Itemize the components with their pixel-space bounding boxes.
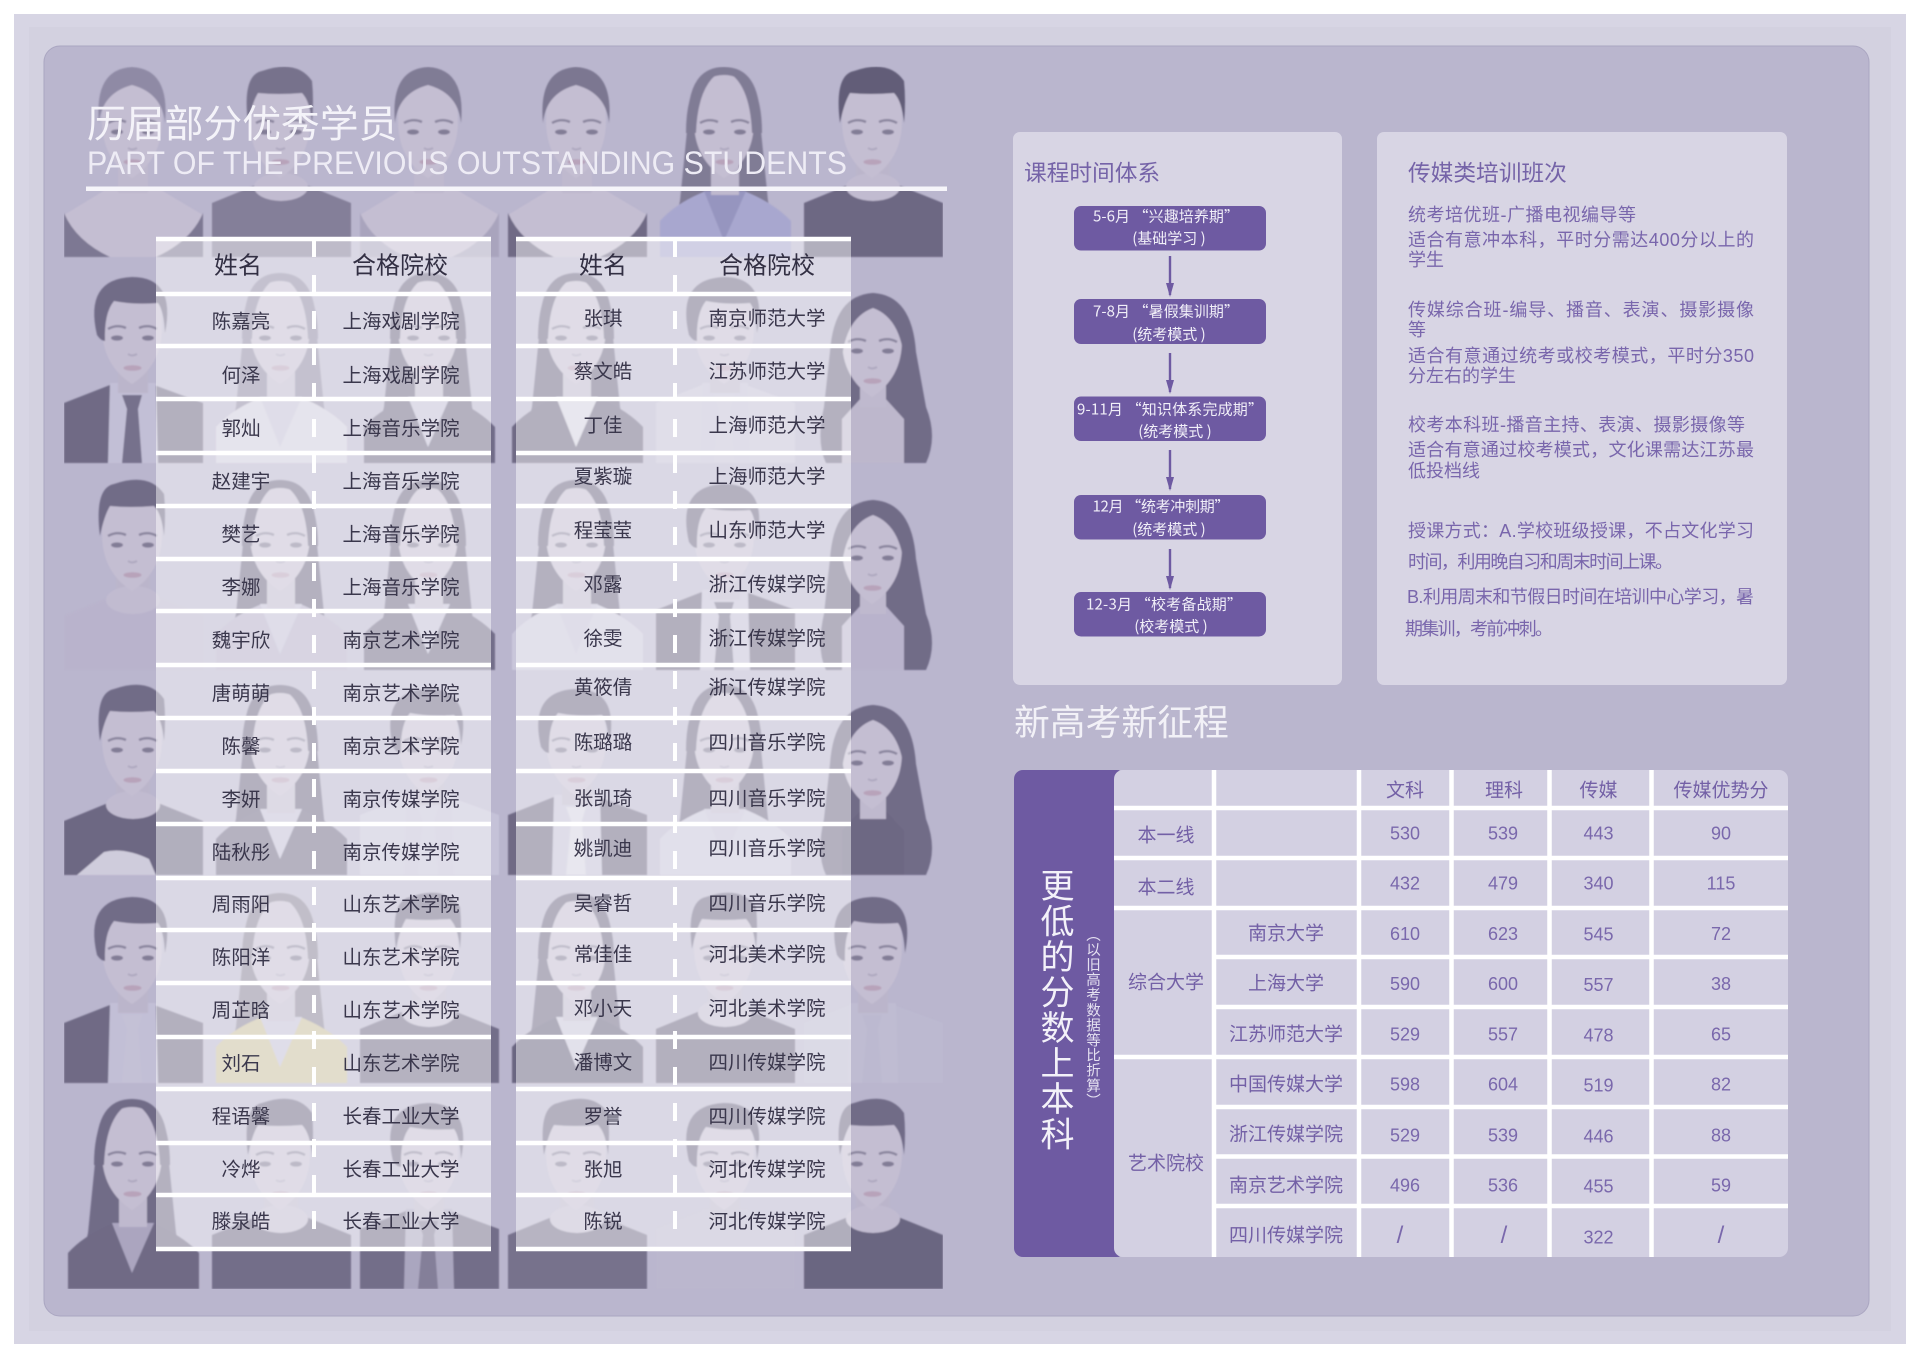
rows: 四川传媒学院 xyxy=(708,1106,826,1128)
comparison table xyxy=(1014,770,1788,1257)
rows: 山东艺术学院 xyxy=(342,947,460,969)
column headers xyxy=(1386,780,1769,802)
class 2: 等 xyxy=(1408,320,1426,340)
class 1: 适合有意冲本科，平时分需达400分以上的 xyxy=(1408,230,1754,250)
header: 姓名 xyxy=(214,253,262,280)
rows: 蔡文皓 xyxy=(574,361,632,383)
scores: 529 xyxy=(1390,1025,1420,1045)
step 5: (校考模式 ) xyxy=(1134,616,1208,636)
portrait wall: six rows of six student photos xyxy=(64,67,943,1289)
step 3: 9-11月 “知识体系完成期” xyxy=(1077,398,1263,420)
title english: PART OF THE PREVIOUS OUTSTANDING STUDENTS xyxy=(87,145,847,181)
heading: 传媒类培训班次 xyxy=(1408,160,1567,186)
scores: 519 xyxy=(1583,1076,1614,1096)
rows: 山东艺术学院 xyxy=(342,894,460,916)
teaching method: 时间，利用晚自习和周末时间上课。 xyxy=(1408,552,1673,572)
scores: 604 xyxy=(1488,1075,1518,1095)
rows: 上海音乐学院 xyxy=(342,418,460,440)
photo row 1 xyxy=(64,67,943,257)
school names: 四川传媒学院 xyxy=(1229,1224,1343,1246)
scores: 82 xyxy=(1711,1075,1731,1095)
row group labels: 综合大学 xyxy=(1128,972,1204,994)
photo row 3 xyxy=(64,480,932,670)
scores: 623 xyxy=(1488,924,1518,944)
column headers: 文科 xyxy=(1386,780,1424,802)
heading: new gaokao: 新高考新征程 xyxy=(1014,703,1229,743)
row group labels: 本二线 xyxy=(1137,876,1195,898)
panel: course schedule xyxy=(1013,132,1342,685)
rows: 山东师范大学 xyxy=(708,520,826,542)
rows: 江苏师范大学 xyxy=(708,361,826,383)
arrow xyxy=(1169,353,1171,392)
step 3 xyxy=(1074,396,1266,442)
rows: 郭灿 xyxy=(221,418,261,440)
rows: 浙江传媒学院 xyxy=(708,574,826,596)
teaching method: 期集训，考前冲刺。 xyxy=(1405,619,1553,639)
rows: 魏宇欣 xyxy=(212,630,270,652)
table background xyxy=(516,239,851,1249)
arrow xyxy=(1169,450,1171,489)
header xyxy=(214,253,448,280)
scores: 530 xyxy=(1390,824,1420,844)
step 3: (统考模式 ) xyxy=(1138,420,1212,442)
scores: 557 xyxy=(1583,975,1614,995)
panel: training classes xyxy=(1377,132,1787,685)
title chinese: 历届部分优秀学员 xyxy=(87,104,397,146)
rows: 南京传媒学院 xyxy=(342,842,460,864)
rows: 陈馨 xyxy=(221,736,261,758)
step 2 xyxy=(1074,299,1266,344)
scores: 590 xyxy=(1390,974,1420,994)
photo row 4 xyxy=(64,685,932,875)
rows: 冷烨 xyxy=(221,1159,261,1181)
scores: / xyxy=(1718,1222,1725,1249)
class 3: 校考本科班-播音主持、表演、摄影摄像等 xyxy=(1408,415,1745,435)
table: students right xyxy=(516,239,851,1249)
rows: 上海戏剧学院 xyxy=(342,365,460,387)
arrow xyxy=(1169,256,1171,295)
rows: 陈嘉亮 xyxy=(212,311,270,333)
side title: 更低的分数上本科 xyxy=(1035,868,1074,1152)
class 2: 传媒综合班-编导、播音、表演、摄影摄像 xyxy=(1408,300,1754,320)
rows: 李妍 xyxy=(221,789,261,811)
school names xyxy=(1229,922,1343,1246)
scores: 65 xyxy=(1711,1025,1731,1045)
cell background xyxy=(1114,770,1788,1257)
scores: 600 xyxy=(1488,974,1518,994)
scores: 529 xyxy=(1390,1126,1420,1146)
rows: 潘博文 xyxy=(574,1052,632,1074)
school names: 南京艺术学院 xyxy=(1229,1174,1343,1196)
step 2: (统考模式 ) xyxy=(1132,324,1206,344)
rows: 上海音乐学院 xyxy=(342,471,460,493)
column headers: 理科 xyxy=(1485,780,1523,802)
rows: 河北传媒学院 xyxy=(708,1159,826,1181)
grid lines xyxy=(1114,770,1788,1257)
school names: 南京大学 xyxy=(1248,922,1324,944)
panel background xyxy=(1013,132,1342,685)
scores: 478 xyxy=(1583,1026,1614,1046)
class 3: 低投档线 xyxy=(1408,461,1480,481)
step 4: 12月 “统考冲刺期” xyxy=(1092,496,1230,516)
dashed divider xyxy=(312,239,316,1249)
school names: 上海大学 xyxy=(1248,972,1324,994)
scores: 88 xyxy=(1711,1126,1731,1146)
scores xyxy=(1390,824,1735,1249)
rows: 陈锐 xyxy=(583,1211,623,1233)
purple side panel xyxy=(1014,770,1126,1257)
rows: 邓小天 xyxy=(574,998,632,1020)
rows: 南京艺术学院 xyxy=(342,630,460,652)
step 1 xyxy=(1074,206,1266,250)
class 3 xyxy=(1408,415,1754,481)
photo row 6 xyxy=(68,1099,943,1289)
rows: 四川音乐学院 xyxy=(708,788,826,810)
rows: 上海师范大学 xyxy=(708,415,826,437)
scores: 610 xyxy=(1390,924,1420,944)
scores: 115 xyxy=(1707,874,1735,894)
rows: 陈阳洋 xyxy=(212,947,270,969)
class 2: 适合有意通过统考或校考模式，平时分350 xyxy=(1408,346,1754,366)
scores: 598 xyxy=(1390,1075,1420,1095)
rows: 黄筱倩 xyxy=(574,677,632,699)
rows: 长春工业大学 xyxy=(342,1211,460,1233)
rows: 四川音乐学院 xyxy=(708,893,826,915)
step 5 xyxy=(1074,592,1266,636)
rows: 河北传媒学院 xyxy=(708,1211,826,1233)
rows: 上海音乐学院 xyxy=(342,524,460,546)
heading: 课程时间体系 xyxy=(1024,160,1160,186)
rows: 山东艺术学院 xyxy=(342,1000,460,1022)
rows: 常佳佳 xyxy=(574,944,632,966)
rows: 南京艺术学院 xyxy=(342,736,460,758)
rows: 姚凯迪 xyxy=(574,838,632,860)
rows: 四川传媒学院 xyxy=(708,1052,826,1074)
panel background xyxy=(1377,132,1787,685)
scores: / xyxy=(1397,1222,1404,1249)
rows: 张旭 xyxy=(583,1159,623,1181)
scores: 539 xyxy=(1488,824,1518,844)
row group labels xyxy=(1128,824,1204,1174)
step 1: (基础学习 ) xyxy=(1132,228,1206,248)
school names: 中国传媒大学 xyxy=(1229,1074,1343,1096)
rows: 南京师范大学 xyxy=(708,308,826,330)
rows: 南京传媒学院 xyxy=(342,789,460,811)
class 2 xyxy=(1408,300,1754,386)
scores: 432 xyxy=(1390,874,1420,894)
rows: 赵建宇 xyxy=(212,471,270,493)
rows: 陆秋彤 xyxy=(212,842,270,864)
rows: 邓露 xyxy=(583,574,623,596)
rows: 罗誉 xyxy=(583,1106,623,1128)
rows: 四川音乐学院 xyxy=(708,732,826,754)
header: 合格院校 xyxy=(719,253,815,280)
dashed divider xyxy=(673,239,677,1249)
rows: 浙江传媒学院 xyxy=(708,628,826,650)
header: 姓名 xyxy=(579,253,627,280)
rows: 河北美术学院 xyxy=(708,998,826,1020)
class 1: 学生 xyxy=(1408,250,1444,270)
rows: 何泽 xyxy=(221,365,261,387)
title block xyxy=(86,104,947,191)
row group labels: 艺术院校 xyxy=(1128,1152,1204,1174)
step 2: 7-8月 “暑假集训期” xyxy=(1093,300,1239,322)
scores: 72 xyxy=(1711,924,1731,944)
step 4 xyxy=(1074,495,1266,540)
column headers: 传媒 xyxy=(1579,780,1618,802)
scores: / xyxy=(1501,1222,1508,1249)
rows: 陈璐璐 xyxy=(574,732,632,754)
rows: 程语馨 xyxy=(212,1106,270,1128)
school names: 浙江传媒学院 xyxy=(1229,1124,1343,1146)
teaching method xyxy=(1405,521,1754,639)
rows: 山东艺术学院 xyxy=(342,1053,460,1075)
rows xyxy=(212,311,460,1233)
scores: 322 xyxy=(1583,1228,1614,1248)
rows: 周雨阳 xyxy=(212,894,270,916)
class 1: 统考培优班-广播电视编导等 xyxy=(1408,205,1636,225)
scores: 557 xyxy=(1488,1025,1518,1045)
rows: 河北美术学院 xyxy=(708,944,826,966)
rows: 长春工业大学 xyxy=(342,1159,460,1181)
step 4: (统考模式 ) xyxy=(1132,518,1206,540)
scores: 455 xyxy=(1583,1177,1614,1197)
table background xyxy=(156,239,491,1249)
scores: 38 xyxy=(1711,974,1731,994)
rows: 长春工业大学 xyxy=(342,1106,460,1128)
scores: 443 xyxy=(1583,824,1614,844)
rows: 李娜 xyxy=(221,577,261,599)
rows: 刘石 xyxy=(221,1053,261,1075)
teaching method: 授课方式：A.学校班级授课，不占文化学习 xyxy=(1408,521,1754,541)
rows: 浙江传媒学院 xyxy=(708,677,826,699)
rows: 丁佳 xyxy=(583,415,623,437)
rows xyxy=(574,308,826,1233)
side note: （以旧高考数据等比折算） xyxy=(1084,927,1100,1108)
photo row 2 xyxy=(64,273,932,463)
step 1: 5-6月 “兴趣培养期” xyxy=(1093,206,1239,226)
rows: 夏紫璇 xyxy=(574,466,632,488)
row group labels: 本一线 xyxy=(1137,824,1195,846)
class 2: 分左右的学生 xyxy=(1408,366,1516,386)
header xyxy=(579,253,815,280)
rows: 上海音乐学院 xyxy=(342,577,460,599)
scores: 536 xyxy=(1488,1176,1518,1196)
column headers: 传媒优势分 xyxy=(1673,780,1769,802)
rows: 四川音乐学院 xyxy=(708,838,826,860)
rows: 张凯琦 xyxy=(574,788,632,810)
teaching method: B.利用周末和节假日时间在培训中心学习，暑 xyxy=(1407,587,1754,607)
class 3: 适合有意通过校考模式，文化课需达江苏最 xyxy=(1408,440,1754,460)
scores: 539 xyxy=(1488,1126,1518,1146)
rows: 滕泉皓 xyxy=(212,1211,270,1233)
arrowheads xyxy=(1166,283,1174,590)
step 5: 12-3月 “校考备战期” xyxy=(1086,594,1242,614)
photo row 5 xyxy=(64,893,943,1083)
rows: 程莹莹 xyxy=(574,520,632,542)
title underline xyxy=(86,186,947,191)
table: students left xyxy=(156,239,491,1249)
rows: 唐萌萌 xyxy=(212,683,270,705)
rows: 南京艺术学院 xyxy=(342,683,460,705)
scores: 340 xyxy=(1583,874,1614,894)
scores: 90 xyxy=(1711,824,1731,844)
header: 合格院校 xyxy=(352,253,448,280)
scores: 479 xyxy=(1488,874,1518,894)
scores: 446 xyxy=(1583,1127,1614,1147)
row and column lines xyxy=(156,239,491,1249)
scores: 59 xyxy=(1711,1176,1731,1196)
rows: 上海戏剧学院 xyxy=(342,311,460,333)
rows: 徐雯 xyxy=(583,628,623,650)
school names: 江苏师范大学 xyxy=(1229,1024,1343,1046)
class 1 xyxy=(1408,205,1754,270)
rows: 樊艺 xyxy=(221,524,261,546)
rows: 张琪 xyxy=(583,308,623,330)
rows: 上海师范大学 xyxy=(708,466,826,488)
rows: 吴睿哲 xyxy=(574,893,632,915)
arrow xyxy=(1169,549,1171,588)
row and column lines xyxy=(516,239,851,1249)
scores: 496 xyxy=(1390,1176,1420,1196)
scores: 545 xyxy=(1583,925,1614,945)
rows: 周芷晗 xyxy=(212,1000,270,1022)
